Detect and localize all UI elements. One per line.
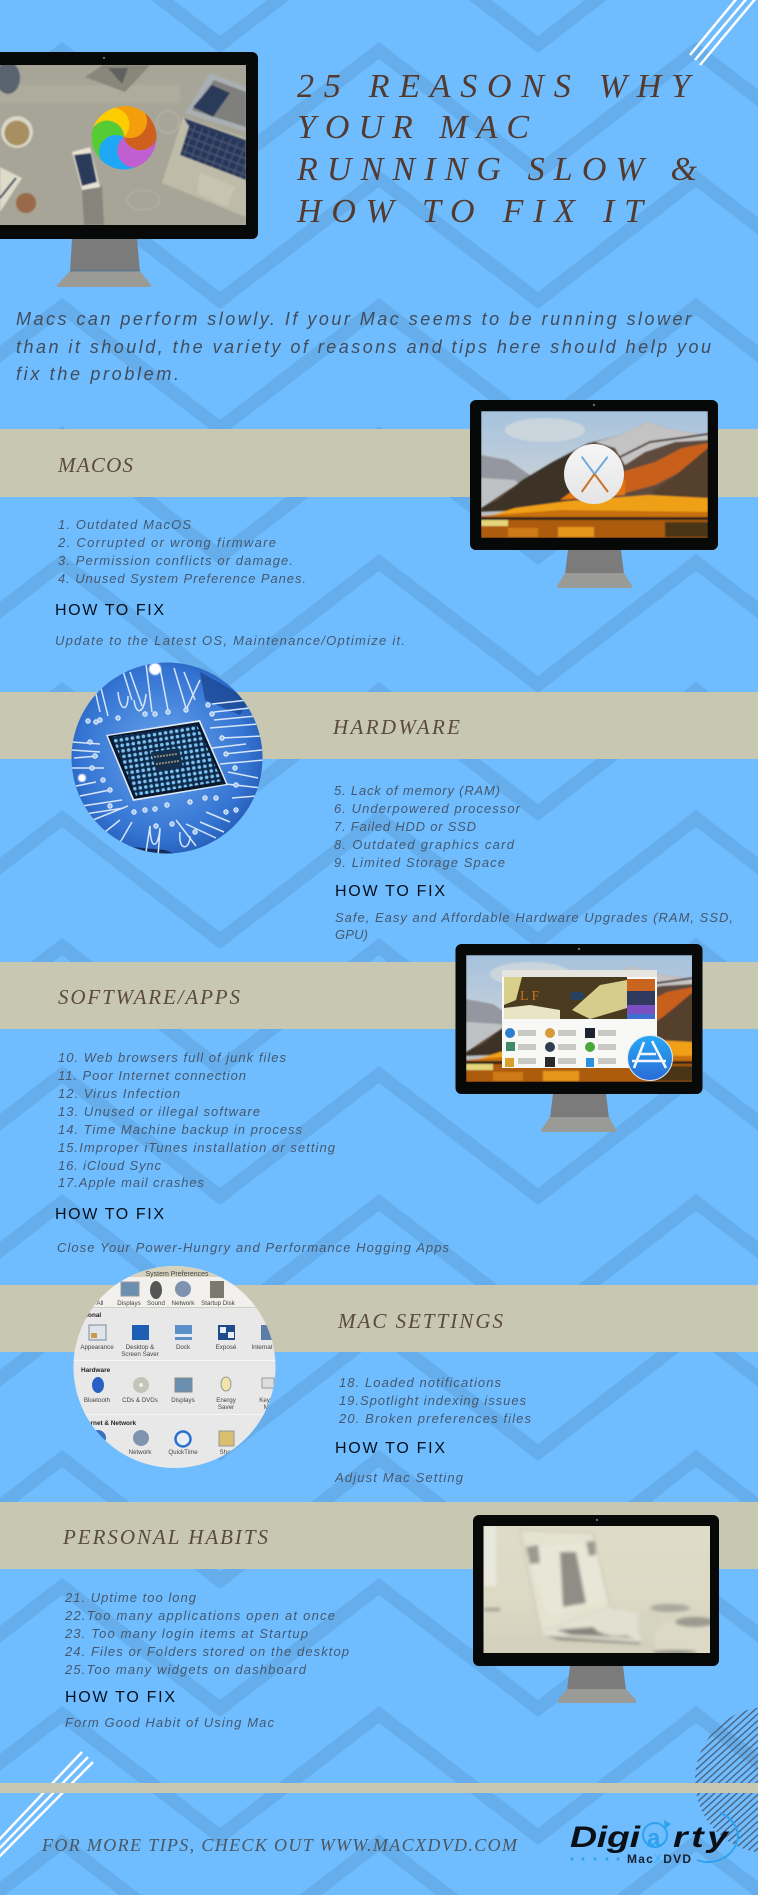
- laptop photo screen: [484, 1526, 710, 1653]
- list: reasons 10-17: 12. Virus Infection: [58, 1086, 180, 1101]
- circular screenshot: System Preferences: Startup Disk: [201, 1300, 236, 1307]
- how to fix label: HOW TO FIX: [65, 1689, 175, 1706]
- circular screenshot: System Preferences: Dock: [176, 1344, 191, 1351]
- band: [0, 1285, 758, 1352]
- App Store window: L F: [520, 989, 540, 1004]
- frame: [470, 400, 718, 550]
- list: reasons 10-17: 11. Poor Internet connection: [58, 1068, 246, 1083]
- circular screenshot: System Preferences: Internat: [252, 1344, 273, 1351]
- macOS X logo: [564, 444, 624, 504]
- circuit traces: [72, 664, 264, 856]
- intro text: [16, 309, 711, 384]
- App Store icon: [628, 1036, 672, 1080]
- circular screenshot: System Preferences: Sound: [147, 1300, 165, 1307]
- circular photo: processor chip: [71, 662, 265, 860]
- list: reasons 1-4: 2. Corrupted or wrong firmware: [57, 535, 276, 550]
- heading: software/apps: SOFTWARE/APPS: [58, 985, 240, 1009]
- how to fix label: HOW TO FIX: [55, 1206, 164, 1223]
- fix description: Adjust Mac Setting: [334, 1470, 464, 1485]
- list: reasons 5-9: 8. Outdated graphics card: [334, 837, 515, 852]
- circular screenshot: System Preferences: Appearance: [80, 1344, 114, 1351]
- footer divider: [0, 1783, 758, 1793]
- list: reasons 5-9: [334, 783, 521, 870]
- fix description: GPU): [335, 927, 368, 942]
- fix description: [335, 910, 733, 942]
- list: reasons 10-17: 17.Apple mail crashes: [58, 1175, 204, 1190]
- header monitor with beach ball: [0, 52, 258, 287]
- how to fix label: HOW TO FIX: [335, 883, 445, 900]
- frame: [473, 1515, 719, 1666]
- circuit pads: [86, 703, 238, 834]
- list: reasons 1-4: [57, 517, 306, 586]
- circular screenshot: System Preferences: Shar: [219, 1449, 233, 1456]
- logo: Digiarty MacXDVD: [570, 1813, 738, 1866]
- list: reasons 10-17: [58, 1050, 336, 1190]
- circular screenshot: System Preferences: Energy: [216, 1397, 237, 1404]
- list: reasons 5-9: 7. Failed HDD or SSD: [334, 819, 476, 834]
- circular screenshot: System Preferences: Saver: [218, 1404, 234, 1411]
- list: reasons 5-9: 9. Limited Storage Space: [334, 855, 505, 870]
- heading: Mac settings: MAC SETTINGS: [337, 1309, 504, 1333]
- list: reasons 1-4: 4. Unused System Preference Panes.: [58, 571, 306, 586]
- stand: [558, 1666, 636, 1703]
- band: [0, 1502, 758, 1569]
- logo: Digiarty MacXDVD: Digi: [570, 1820, 642, 1854]
- list: reasons 21-25: 21. Uptime too long: [64, 1590, 197, 1605]
- fix description: Safe, Easy and Affordable Hardware Upgrades (RAM, SSD,: [335, 910, 733, 925]
- panel: hardware: [0, 662, 758, 942]
- list: reasons 21-25: 24. Files or Folders stored on the desktop: [64, 1644, 349, 1659]
- frame: [456, 944, 702, 1094]
- list: reasons 21-25: 25.Too many widgets on dashboard: [64, 1662, 307, 1677]
- list: reasons 1-4: 1. Outdated MacOS: [58, 517, 191, 532]
- list: reasons 1-4: 3. Permission conflicts or damage.: [58, 553, 293, 568]
- decorative hatched circle: [695, 1708, 758, 1852]
- chip: [106, 720, 228, 801]
- App Store window: [502, 970, 657, 1068]
- monitor: High Sierra: [470, 400, 718, 588]
- wallpaper: [466, 955, 693, 1082]
- heading: personal habits: PERSONAL HABITS: [62, 1525, 268, 1549]
- logo emblem: a: [647, 1825, 661, 1852]
- fix description: Update to the Latest OS, Maintenance/Optimize it.: [55, 633, 405, 648]
- circular screenshot: System Preferences: Network: [172, 1300, 195, 1307]
- list: reasons 10-17: 13. Unused or illegal software: [58, 1104, 260, 1119]
- how to fix label: HOW TO FIX: [55, 602, 164, 619]
- circular screenshot: System Preferences: Screen Saver: [121, 1351, 159, 1358]
- wallpaper: [481, 411, 708, 538]
- panel: software and apps: [0, 944, 758, 1255]
- list: reasons 5-9: 6. Underpowered processor: [334, 801, 521, 816]
- list: reasons 10-17: 14. Time Machine backup in process: [58, 1122, 302, 1137]
- title: HOW TO FIX IT: [296, 193, 645, 230]
- camera: [103, 57, 105, 59]
- logo: Digiarty MacXDVD: rty: [673, 1820, 730, 1854]
- circular screenshot: System Preferences: Displays: [171, 1397, 195, 1404]
- list: reasons 21-25: 22.Too many applications open at once: [64, 1608, 335, 1623]
- how to fix label: HOW TO FIX: [335, 1440, 445, 1457]
- list: reasons 18-20: 18. Loaded notifications: [339, 1375, 502, 1390]
- logo: Digiarty MacXDVD: MacXDVD: [627, 1852, 691, 1866]
- panel: macOS: [0, 400, 758, 648]
- stand: [557, 550, 632, 588]
- intro text: Macs can perform slowly. If your Mac seems to be running slower: [16, 309, 692, 329]
- list: reasons 18-20: 19.Spotlight indexing issues: [339, 1393, 526, 1408]
- monitor frame: [0, 52, 258, 239]
- band: [0, 692, 758, 759]
- list: reasons 10-17: 10. Web browsers full of junk files: [58, 1050, 286, 1065]
- title: 25 REASONS WHY: [297, 68, 693, 105]
- circular screenshot: System Preferences: System Preferences: [145, 1271, 209, 1278]
- heading: macOS: MACOS: [57, 453, 134, 477]
- stand: [541, 1094, 616, 1132]
- intro text: fix the problem.: [16, 364, 179, 384]
- fix description: Form Good Habit of Using Mac: [65, 1715, 274, 1730]
- preference icons: [89, 1325, 275, 1446]
- circular screenshot: System Preferences: Displays: [117, 1300, 141, 1307]
- panel: Mac settings: [0, 1265, 758, 1485]
- circular screenshot: System Preferences: Bluetooth: [84, 1397, 111, 1404]
- panel: personal habits: [0, 1502, 758, 1730]
- circular screenshot: System Preferences: Hardware: [81, 1367, 111, 1374]
- monitor stand: [57, 239, 151, 287]
- band: [0, 429, 758, 497]
- circular screenshot: System Preferences: Network: [129, 1449, 152, 1456]
- monitor: laptop photo: [473, 1515, 726, 1703]
- circular screenshot: System Preferences: [70, 1265, 280, 1469]
- heading: hardware: HARDWARE: [332, 715, 460, 739]
- decorative white stripes top right: [690, 0, 758, 65]
- list: reasons 10-17: 15.Improper iTunes installation or setting: [58, 1140, 336, 1155]
- circular screenshot: System Preferences: Keybo: [259, 1397, 277, 1404]
- logo emblem: [643, 1820, 671, 1852]
- circular screenshot: System Preferences: Exposé: [216, 1344, 237, 1351]
- title: RUNNING SLOW &: [296, 151, 698, 188]
- circular screenshot: System Preferences: Mo: [264, 1404, 273, 1411]
- list: reasons 21-25: [64, 1590, 349, 1677]
- circular screenshot: System Preferences: CDs & DVDs: [122, 1397, 158, 1404]
- circular screenshot: System Preferences: rsonal: [82, 1312, 101, 1319]
- title: [296, 68, 698, 230]
- circular screenshot: System Preferences: All: [97, 1300, 103, 1307]
- desk photo screen: [0, 62, 246, 225]
- footer call to action: FOR MORE TIPS, CHECK OUT WWW.MACXDVD.COM: [41, 1835, 518, 1855]
- list: reasons 21-25: 23. Too many login items at Startup: [64, 1626, 308, 1641]
- band: [0, 962, 758, 1029]
- intro text: than it should, the variety of reasons and tips here should help you: [16, 337, 711, 357]
- list: reasons 18-20: [338, 1375, 532, 1426]
- toolbar icons: [121, 1281, 224, 1299]
- decorative white stripes bottom left: [0, 1752, 93, 1860]
- fix description: Close Your Power-Hungry and Performance Hogging Apps: [57, 1240, 450, 1255]
- beach ball icon: [92, 106, 157, 169]
- circular screenshot: System Preferences: QuickTime: [168, 1449, 198, 1456]
- list: reasons 10-17: 16. iCloud Sync: [58, 1158, 162, 1173]
- list: reasons 5-9: 5. Lack of memory (RAM): [334, 783, 500, 798]
- title: YOUR MAC: [297, 109, 529, 146]
- monitor: App Store: [456, 944, 702, 1132]
- circular screenshot: System Preferences: Desktop &: [126, 1344, 155, 1351]
- logo stars: [570, 1858, 620, 1860]
- list: reasons 18-20: 20. Broken preferences files: [338, 1411, 532, 1426]
- circular screenshot: System Preferences: ernet & Network: [87, 1420, 136, 1427]
